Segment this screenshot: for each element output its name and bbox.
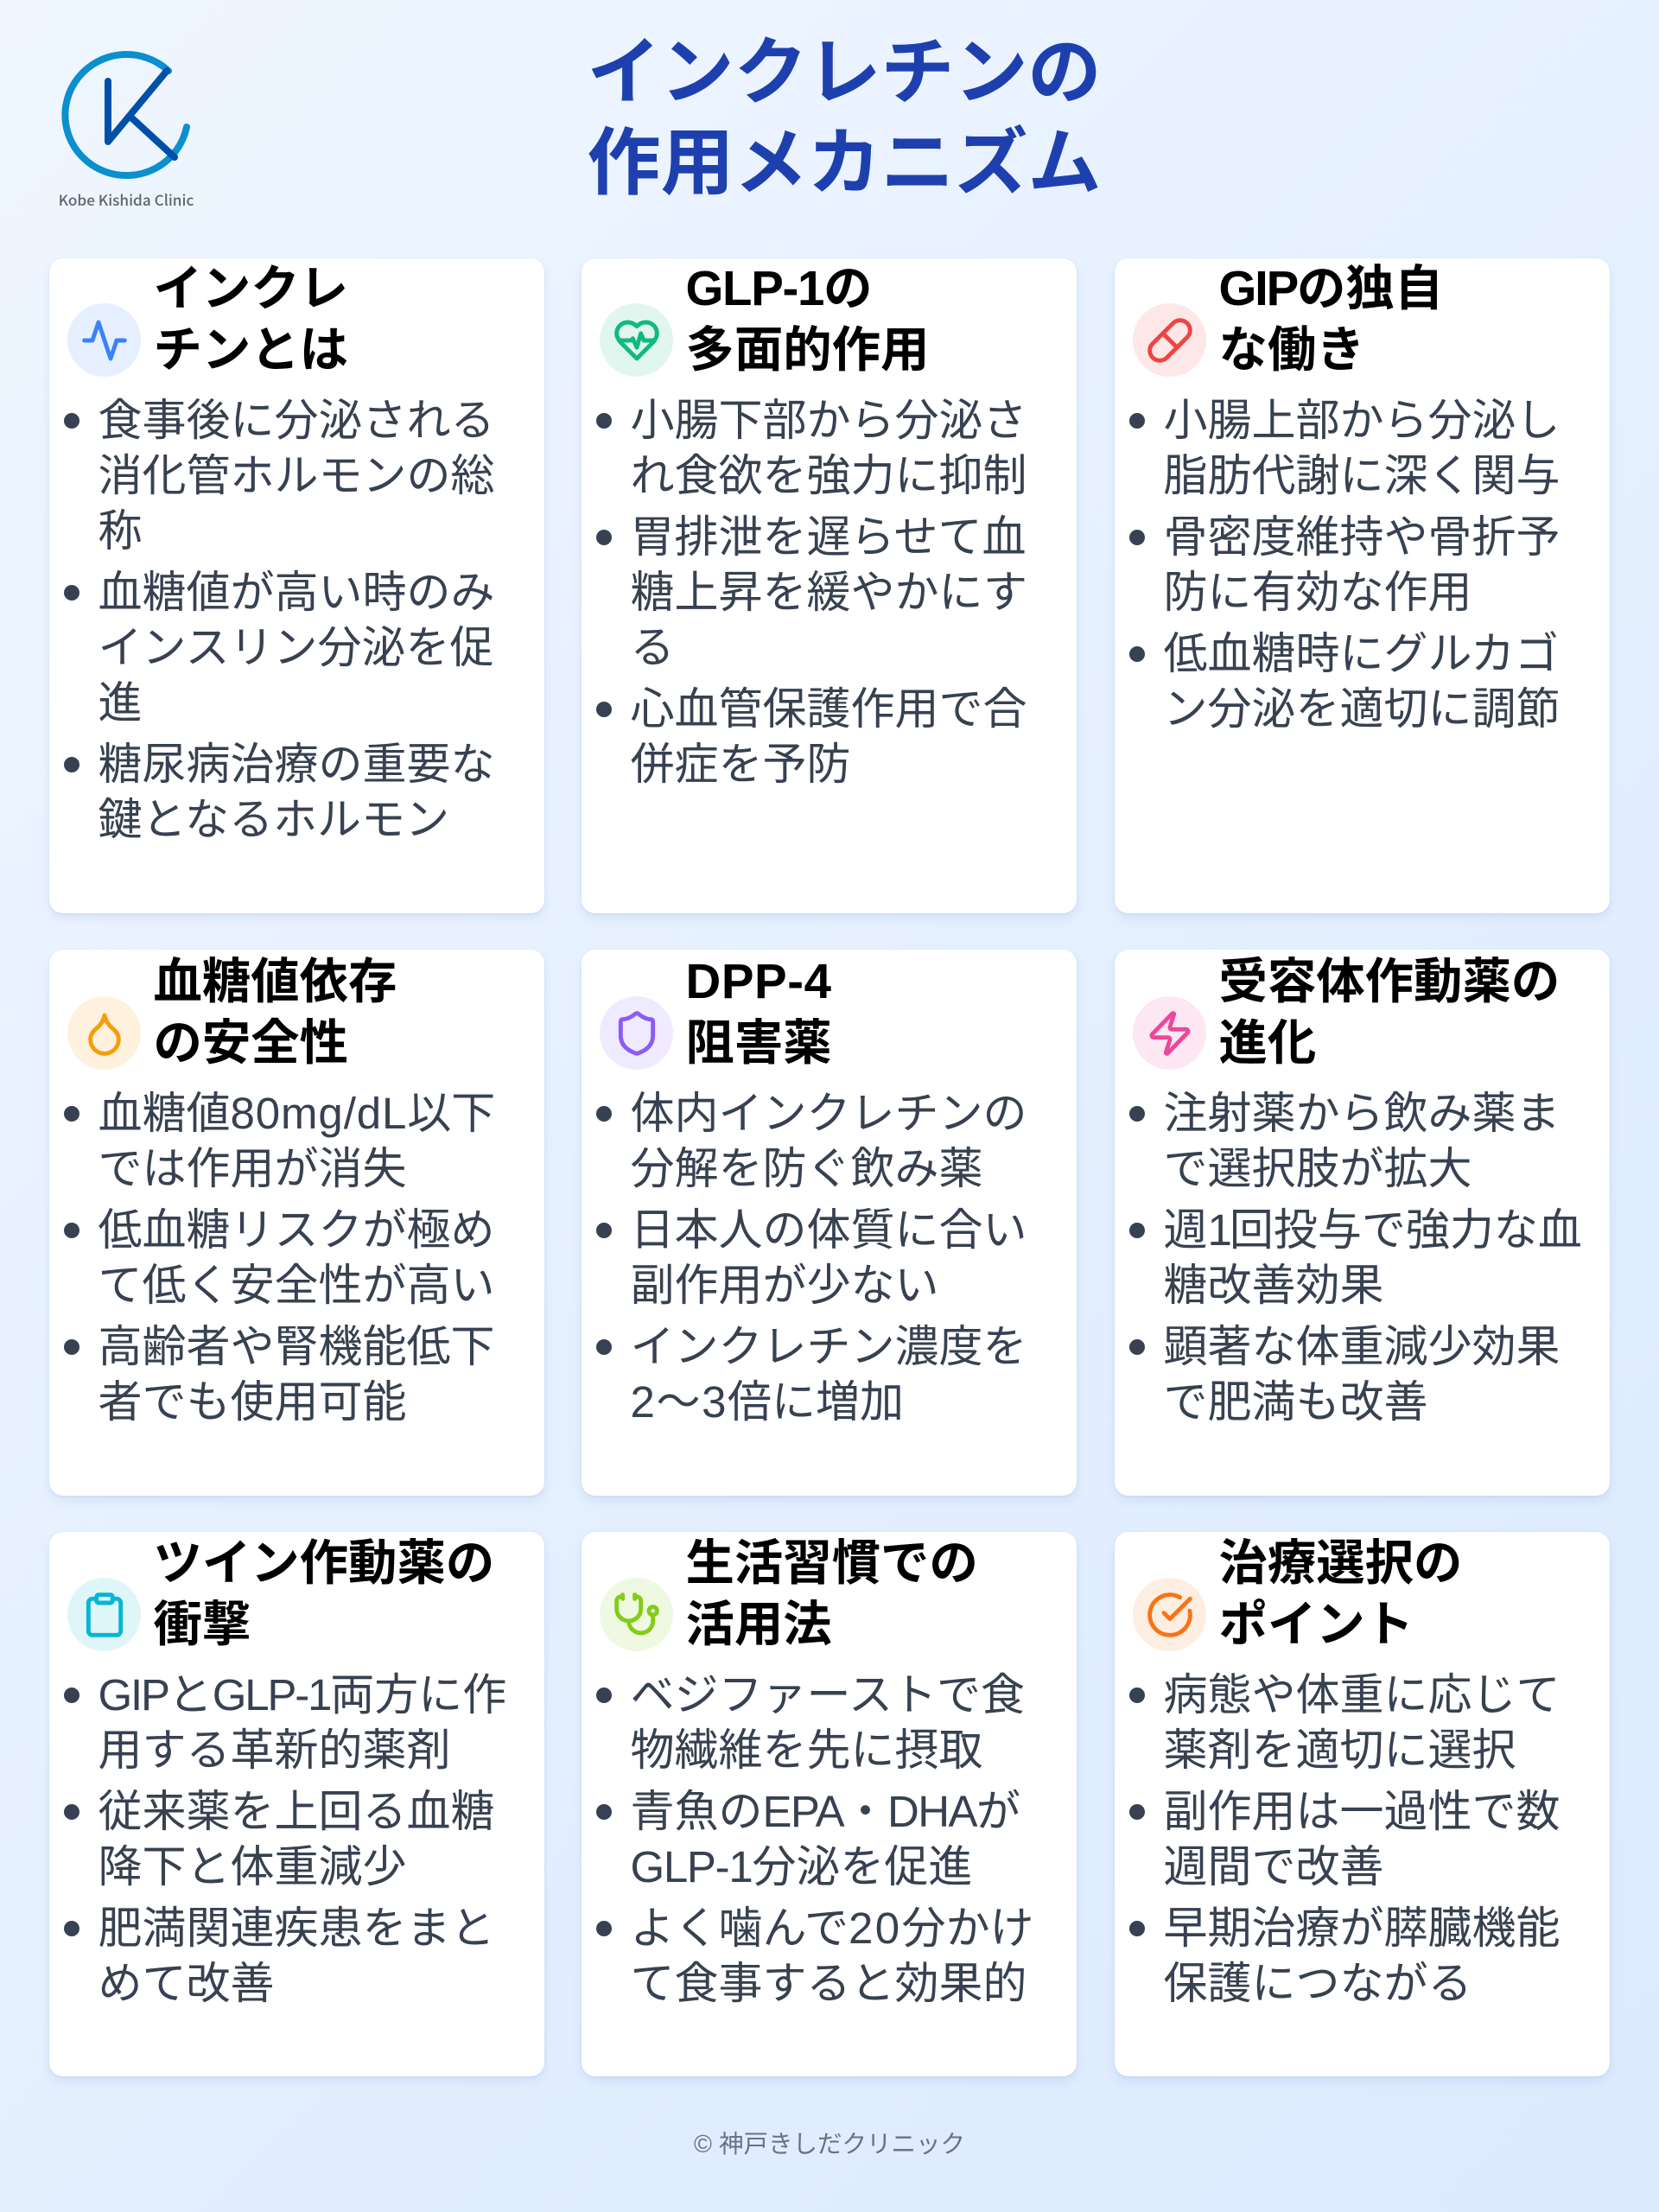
heading (1218, 261, 1443, 377)
panel: GIPの独自な働き (1115, 258, 1610, 913)
bullet list: 糖尿病治療の重要な (99, 740, 495, 789)
bullet list: 食事後に分泌される (99, 396, 495, 445)
footer: © 神戸きしだクリニック (694, 2131, 965, 2158)
bullet list: 肥満関連疾患をまと (99, 1904, 495, 1953)
heading: インクレ (154, 261, 348, 315)
bullet list: 防に有効な作用 (1163, 568, 1472, 617)
bullet list: 顕著な体重減少効果 (1163, 1322, 1560, 1371)
bullet list: 心血管保護作用で合 (631, 684, 1027, 734)
bullet list: ン分泌を適切に調節 (1163, 684, 1560, 734)
panel: インクレチンとは (49, 258, 544, 913)
bullet list: 糖改善効果 (1163, 1261, 1384, 1310)
bullet list: 併症を予防 (631, 740, 851, 789)
bullet list: 週1回投与で強力な血 (1163, 1205, 1582, 1255)
heading: 治療選択の (1218, 1535, 1462, 1590)
heading: ポイント (1218, 1597, 1414, 1650)
bullet list: 小腸上部から分泌し (1163, 396, 1560, 445)
bullet list: 鍵となるホルモン (99, 795, 449, 844)
bullet list: 物繊維を先に摂取 (631, 1726, 983, 1775)
heading: 血糖値依存 (154, 954, 397, 1008)
bullet list: めて改善 (99, 1959, 275, 2008)
icon: shield (600, 996, 673, 1070)
bullet list: 血糖値が高い時のみ (99, 568, 495, 617)
panel: ツイン作動薬の衝撃 (49, 1532, 544, 2076)
panel: 治療選択のポイント (1115, 1532, 1610, 2076)
bullet list: 分解を防ぐ飲み薬 (631, 1144, 983, 1193)
heading: 進化 (1218, 1014, 1316, 1070)
bullet list: 低血糖時にグルカゴ (1163, 629, 1559, 678)
bullet list (596, 1670, 1033, 2008)
title: 作用メカニズム (587, 104, 1101, 210)
bullet list: 降下と体重減少 (99, 1842, 407, 1891)
bullet list: 高齢者や腎機能低下 (99, 1322, 495, 1371)
bullet list: 従来薬を上回る血糖 (99, 1787, 495, 1836)
heading: チンとは (154, 321, 348, 377)
title (587, 13, 1101, 210)
bullet list: 血糖値80mg/dL以下 (99, 1089, 495, 1138)
bullet list (1129, 1670, 1560, 2008)
bullet list: インスリン分泌を促 (99, 623, 493, 672)
heading: 多面的作用 (686, 321, 929, 377)
heading (154, 1535, 494, 1650)
heading: 阻害薬 (686, 1014, 832, 1070)
panel: DPP-4阻害薬 (582, 950, 1077, 1496)
logo: Kobe Kishida Clinic: Kobe Kishida Clinic (59, 188, 194, 210)
heading: ツイン作動薬の (154, 1535, 494, 1590)
icon: circle check (1133, 1578, 1206, 1651)
heading: GIPの独自 (1218, 261, 1443, 315)
bullet list: 日本人の体質に合い (631, 1205, 1027, 1255)
icon: pill (1133, 303, 1206, 377)
bullet list: 薬剤を適切に選択 (1163, 1726, 1516, 1775)
heading: の安全性 (154, 1014, 348, 1070)
bullet list: 病態や体重に応じて (1163, 1670, 1560, 1719)
bullet list: て低く安全性が高い (99, 1261, 495, 1310)
heading (154, 261, 348, 377)
bullet list: 胃排泄を遅らせて血 (631, 512, 1026, 562)
bullet list (64, 1089, 495, 1427)
heading: 受容体作動薬の (1218, 954, 1560, 1008)
bullet list: て食事すると効果的 (631, 1959, 1027, 2008)
bullet list: GLP-1分泌を促進 (631, 1842, 972, 1891)
bullet list (1129, 1089, 1582, 1427)
heading: 衝撃 (154, 1597, 251, 1650)
bullet list: 称 (99, 506, 143, 556)
bullet list: れ食欲を強力に抑制 (631, 451, 1027, 500)
heading (154, 954, 397, 1070)
icon: zap (1133, 996, 1206, 1070)
bullet list: 低血糖リスクが極め (99, 1205, 495, 1255)
heading (686, 954, 832, 1070)
icon: droplet (67, 996, 141, 1070)
bullet list: インクレチン濃度を (631, 1322, 1027, 1371)
bullet list: 保護につながる (1163, 1959, 1472, 2008)
bullet list: 小腸下部から分泌さ (631, 396, 1027, 445)
bullet list: 週間で改善 (1163, 1842, 1384, 1891)
icon: heart pulse (600, 303, 673, 377)
bullet list: ベジファーストで食 (631, 1670, 1025, 1719)
panel: 生活習慣での活用法 (582, 1532, 1077, 2076)
bullet list: 体内インクレチンの (631, 1089, 1027, 1138)
bullet list: GIPとGLP-1両方に作 (99, 1670, 506, 1719)
bullet list: 骨密度維持や骨折予 (1163, 512, 1560, 562)
heading (1218, 954, 1560, 1070)
bullet list (64, 1670, 506, 2008)
heading: DPP-4 (686, 954, 832, 1008)
panel: 血糖値依存の安全性 (49, 950, 544, 1496)
bullet list: で肥満も改善 (1163, 1377, 1428, 1427)
bullet list: 青魚のEPA・DHAが (631, 1787, 1020, 1836)
bullet list: よく噛んで20分かけ (631, 1904, 1033, 1953)
bullet list: 副作用は一過性で数 (1163, 1787, 1560, 1836)
bullet list (596, 396, 1027, 789)
heading (686, 1535, 978, 1650)
bullet list: 消化管ホルモンの総 (99, 451, 495, 500)
heading: 活用法 (686, 1597, 832, 1650)
bullet list: 進 (99, 678, 143, 728)
heading (1218, 1535, 1462, 1650)
icon: clipboard (67, 1578, 141, 1651)
bullet list: 用する革新的薬剤 (99, 1726, 451, 1775)
heading: GLP-1の (686, 261, 872, 315)
heading (686, 261, 929, 377)
heading: な働き (1218, 321, 1365, 377)
icon: activity (67, 303, 141, 377)
bullet list (1129, 396, 1560, 734)
bullet list: では作用が消失 (99, 1144, 407, 1193)
logo: Kobe Kishida Clinic (59, 51, 194, 210)
bullet list: 早期治療が膵臓機能 (1163, 1904, 1560, 1953)
bullet list: 者でも使用可能 (99, 1377, 407, 1427)
bullet list: 副作用が少ない (631, 1261, 939, 1310)
panel: GLP-1の多面的作用 (582, 258, 1077, 913)
bullet list: 2〜3倍に増加 (631, 1377, 904, 1427)
bullet list: で選択肢が拡大 (1163, 1144, 1472, 1193)
bullet list: る (631, 623, 675, 672)
bullet list: 糖上昇を緩やかにす (631, 568, 1027, 617)
title: インクレチンの (587, 13, 1101, 119)
icon: stethoscope (600, 1578, 673, 1651)
bullet list: 脂肪代謝に深く関与 (1163, 451, 1560, 500)
bullet list (596, 1089, 1027, 1427)
bullet list (64, 396, 495, 844)
bullet list: 注射薬から飲み薬ま (1163, 1089, 1560, 1138)
heading: 生活習慣での (686, 1535, 978, 1590)
panel: 受容体作動薬の進化 (1115, 950, 1610, 1496)
